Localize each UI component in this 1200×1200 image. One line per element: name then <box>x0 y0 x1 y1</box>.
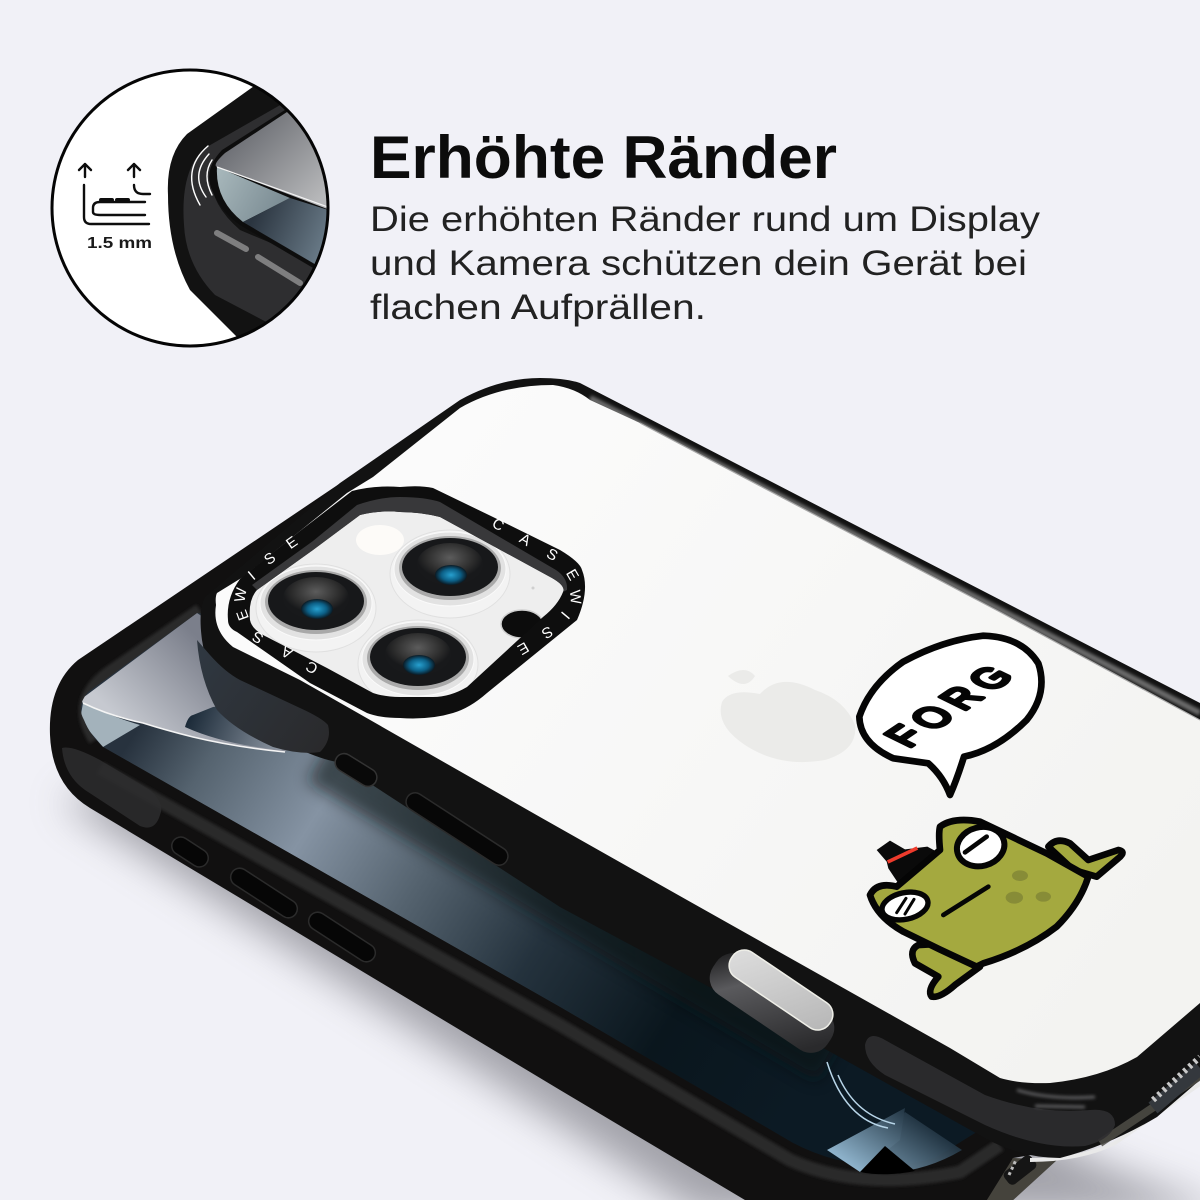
bezel lettering: A <box>278 642 296 662</box>
impact arcs <box>192 146 212 205</box>
white edge hairline <box>640 423 1200 720</box>
front case texture pad <box>865 1036 1115 1147</box>
heading: Erhöhte Ränder <box>370 124 837 191</box>
screen highlights bottom <box>860 1112 962 1173</box>
1.5 mm edge icon <box>79 164 150 224</box>
frog eye: large <box>952 822 1009 872</box>
body text: Die erhöhten Ränder rund um Display <box>370 200 1041 239</box>
front phone case <box>197 378 1200 1160</box>
bezel lettering: A <box>516 530 534 550</box>
wallpaper dark notch <box>185 705 282 750</box>
phone shadow <box>60 750 1200 1200</box>
lidar sensor <box>501 610 543 638</box>
bezel lettering <box>231 515 584 677</box>
inset circle: raised edge detail <box>52 70 350 346</box>
bezel lettering: W <box>566 589 584 606</box>
lens: top <box>390 530 510 618</box>
camera plate <box>250 511 564 697</box>
bezel lettering: S <box>538 622 556 642</box>
bezel lettering: E <box>514 638 532 658</box>
bumper corner close-up <box>168 87 326 336</box>
lens: bottom <box>358 620 478 708</box>
body text: und Kamera schützen dein Gerät bei <box>370 244 1027 283</box>
frog body <box>870 820 1088 967</box>
back case bumper <box>50 482 1060 1200</box>
lens: left <box>256 564 376 652</box>
frog spots <box>1006 870 1051 904</box>
bezel lettering: E <box>562 566 582 584</box>
bezel lettering: C <box>489 515 507 535</box>
frog eye: small <box>879 888 931 924</box>
bezel lettering: I <box>245 568 259 584</box>
1.5 mm label: 1.5 mm <box>87 235 152 252</box>
power button <box>403 789 511 869</box>
front case rim sheen <box>1017 1090 1095 1107</box>
mute switch <box>332 750 380 790</box>
wallpaper light wedge <box>80 703 140 747</box>
bezel lettering: W <box>231 586 251 603</box>
outer hairline and strip <box>1030 1084 1200 1160</box>
FORG lettering: FORG <box>876 661 1023 753</box>
bezel inner bevel <box>252 497 567 592</box>
sticker: speech bubble FORG <box>859 636 1041 795</box>
screen wallpaper upper <box>82 613 286 752</box>
back case rim sheen <box>85 610 1000 1180</box>
frog legs <box>1048 841 1122 877</box>
frog mouth <box>943 887 988 915</box>
sticker: frog <box>870 820 1122 997</box>
back case side buttons <box>168 834 379 965</box>
bezel lettering: E <box>283 533 301 553</box>
white back surface <box>215 385 1200 1083</box>
frog hat <box>877 841 940 883</box>
speaker strip <box>1153 1057 1200 1108</box>
camera-side translucent zone <box>197 640 329 753</box>
back phone lower port <box>1002 1153 1038 1187</box>
screen <box>80 613 980 1165</box>
screen shadow under front phone <box>320 760 830 1060</box>
upper rim gradient <box>590 398 1200 713</box>
raised edge screen reflection <box>216 112 335 210</box>
bezel lettering: S <box>261 549 279 569</box>
bezel lettering: S <box>249 627 267 647</box>
rim khaki edge <box>1100 1076 1200 1143</box>
flash <box>356 525 404 555</box>
back phone right corner <box>985 1158 1057 1200</box>
camera ring <box>228 486 585 718</box>
apple logo <box>721 670 855 762</box>
bezel lettering: E <box>233 607 253 623</box>
wallpaper curve <box>83 703 285 752</box>
front case bumper <box>201 378 1200 1158</box>
charging port <box>702 945 842 1061</box>
bezel lettering: I <box>557 608 573 622</box>
body text: flachen Aufprällen. <box>370 288 706 327</box>
camera bezel band <box>228 486 585 718</box>
back case texture pad <box>62 748 161 828</box>
bezel lettering: C <box>303 657 321 677</box>
bezel lettering: S <box>543 545 561 565</box>
back phone in case <box>50 482 1060 1200</box>
microphone dot <box>532 586 534 590</box>
body text <box>370 200 1041 327</box>
